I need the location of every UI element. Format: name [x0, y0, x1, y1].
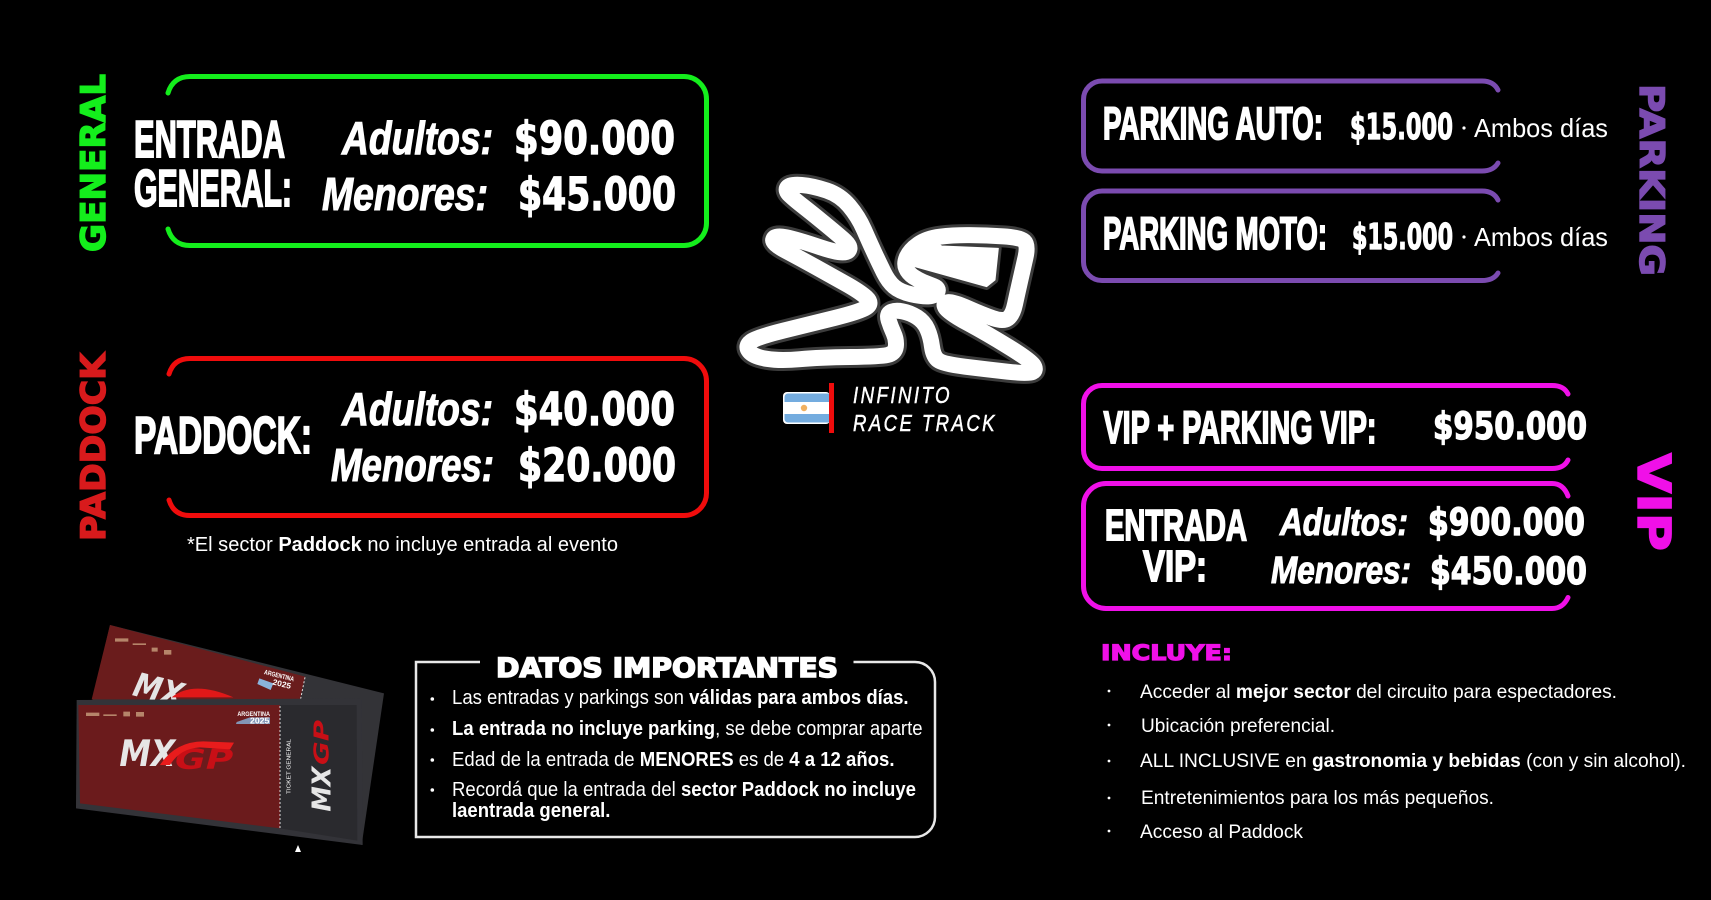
list: important facts: La entrada no incluye parking, se debe comprar aparte	[452, 718, 923, 740]
card: entrada vip: VIP:	[1143, 542, 1207, 591]
price: menores: $45.000	[518, 168, 676, 221]
front ticket: GP	[310, 720, 334, 765]
side label: GENERAL: GENERAL	[74, 74, 114, 252]
side label: VIP: VIP	[1627, 453, 1680, 551]
front ticket: 2025	[250, 717, 270, 726]
illustration: event tickets	[76, 625, 384, 845]
card: vip + parking	[1084, 386, 1587, 468]
price: adultos: Adultos:	[341, 112, 493, 164]
frame	[416, 662, 935, 837]
price: menores: Menores:	[331, 439, 494, 491]
card: parking moto: $15.000	[1352, 217, 1453, 258]
panel: datos importantes	[416, 653, 935, 837]
list: includes: Ubicación preferencial.	[1141, 715, 1335, 737]
card: entrada vip	[1084, 484, 1587, 608]
back ticket: ARGENTINA	[263, 669, 295, 683]
panel: parking	[1084, 81, 1671, 280]
price: menores	[331, 439, 676, 492]
list: includes: ALL INCLUSIVE en gastronomia y bebidas (con y sin alcohol).	[1140, 750, 1686, 772]
card: vip + parking: $950.000	[1433, 405, 1587, 448]
back ticket	[92, 625, 384, 845]
front ticket: MX	[308, 765, 338, 812]
front ticket: ARGENTINA	[237, 711, 270, 718]
panel: entrada general	[74, 74, 706, 252]
list: includes	[1108, 681, 1686, 843]
icon: circuit map	[747, 185, 1035, 373]
front ticket: MX	[119, 732, 177, 775]
list: includes: Acceder al mejor sector del circuito para espectadores.	[1140, 681, 1617, 703]
card: entrada vip: Adultos:	[1279, 502, 1408, 544]
card: parking auto: Ambos días	[1474, 113, 1608, 143]
front ticket: TICKET GENERAL	[287, 739, 293, 794]
venue name: INFINITO	[853, 382, 952, 408]
back ticket: MX	[130, 665, 189, 715]
card: vip + parking: VIP + PARKING VIP:	[1104, 402, 1376, 453]
card: entrada vip: Menores:	[1271, 550, 1411, 592]
price: adultos	[341, 383, 675, 436]
back ticket: 2025	[272, 678, 293, 691]
green frame	[168, 76, 706, 246]
card: parking auto: PARKING AUTO:	[1103, 98, 1323, 149]
red frame	[169, 358, 706, 516]
side label: PARKING: PARKING	[1631, 84, 1671, 276]
list: important facts: laentrada general.	[452, 800, 610, 822]
list: important facts: Las entradas y parkings son válidas para ambos días.	[452, 687, 909, 709]
venue name: RACE TRACK	[853, 410, 997, 436]
panel: vip	[1084, 386, 1680, 608]
heading: incluye: INCLUYE:	[1101, 641, 1232, 665]
card: parking auto: $15.000	[1350, 107, 1453, 148]
price: adultos: $40.000	[514, 383, 675, 436]
side label: PADDOCK: PADDOCK	[74, 351, 114, 541]
list: important facts: Edad de la entrada de MENORES es de 4 a 12 años.	[452, 749, 894, 771]
front ticket: GP	[175, 744, 233, 775]
heading: entrada general	[134, 111, 292, 218]
panel: paddock	[74, 351, 706, 556]
price: adultos: $90.000	[514, 112, 675, 165]
heading: entrada general: GENERAL:	[134, 160, 292, 218]
front ticket	[76, 698, 363, 845]
card: parking moto: Ambos días	[1474, 222, 1608, 252]
venue name	[853, 382, 997, 436]
list: includes: Acceso al Paddock	[1140, 821, 1303, 843]
heading: paddock: PADDOCK:	[134, 407, 312, 465]
list: important facts	[430, 687, 923, 822]
card: entrada vip: ENTRADA	[1105, 501, 1247, 550]
price: menores	[322, 168, 676, 221]
list: includes: Entretenimientos para los más pequeños.	[1141, 787, 1494, 809]
price: adultos	[341, 112, 675, 165]
panel: vip includes	[1101, 641, 1686, 843]
price: menores: $20.000	[518, 439, 676, 492]
list: important facts: Recordá que la entrada del sector Paddock no incluye	[452, 779, 916, 801]
card: entrada vip: $900.000	[1428, 501, 1585, 544]
card: parking auto	[1084, 81, 1608, 171]
icon: argentina flag	[783, 383, 834, 433]
heading: entrada general: ENTRADA	[134, 111, 285, 169]
price: menores: Menores:	[322, 168, 488, 220]
heading: datos importantes: DATOS IMPORTANTES	[496, 653, 838, 684]
card: parking moto: PARKING MOTO:	[1103, 208, 1327, 259]
card: parking moto	[1084, 191, 1608, 280]
price: adultos: Adultos:	[341, 383, 493, 435]
card: entrada vip: $450.000	[1430, 550, 1587, 593]
marker: small triangle	[295, 845, 301, 852]
footnote: *El sector Paddock no incluye entrada al evento	[187, 534, 618, 556]
